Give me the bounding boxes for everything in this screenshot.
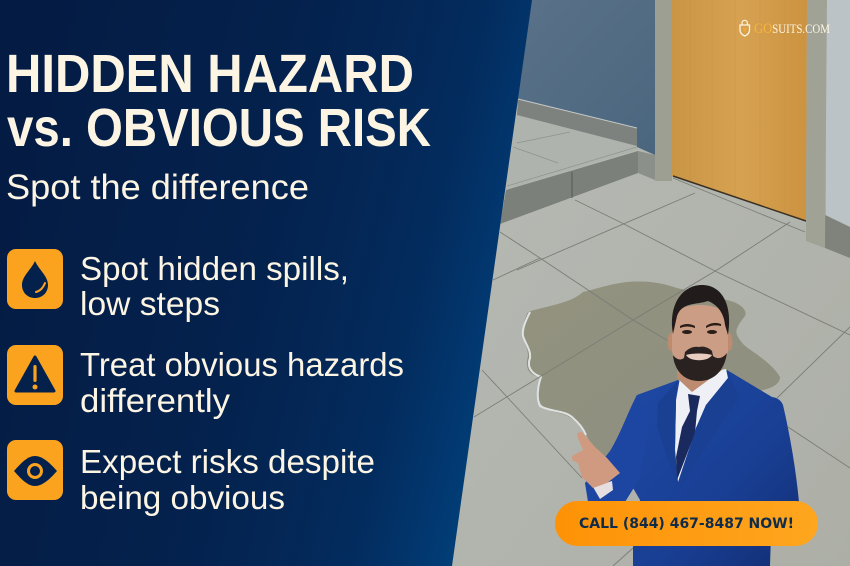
list item: expect risks: being obvious bbox=[80, 480, 285, 517]
wall bbox=[510, 0, 655, 155]
tie bbox=[676, 394, 700, 480]
subtitle: Spot the difference bbox=[6, 168, 309, 207]
list item: expect risks: Expect risks despite bbox=[80, 444, 375, 481]
floor tile joints bbox=[474, 178, 850, 566]
logo: GOSUITS.COM bbox=[754, 21, 830, 37]
door frame right bbox=[806, 0, 827, 248]
right wall bbox=[826, 0, 850, 227]
lapels bbox=[657, 380, 678, 488]
list item: obvious hazards bbox=[80, 347, 404, 420]
title: HIDDEN HAZARD bbox=[6, 45, 414, 104]
icon: water drop bbox=[7, 249, 63, 309]
hair bbox=[672, 285, 729, 335]
title bbox=[6, 45, 431, 158]
spill edge bbox=[523, 312, 586, 435]
shirt bbox=[675, 369, 728, 482]
step riser bbox=[500, 151, 638, 224]
baseboard upper bbox=[517, 99, 637, 146]
list item: hidden spills: Spot hidden spills, bbox=[80, 251, 349, 288]
face bbox=[672, 305, 728, 380]
icon: eye bbox=[7, 440, 63, 500]
suit torso bbox=[612, 370, 799, 566]
list item: hidden spills: low steps bbox=[80, 286, 220, 323]
list item: obvious hazards: Treat obvious hazards bbox=[80, 347, 404, 384]
call to action button: CALL (844) 467-8487 NOW! bbox=[579, 516, 794, 532]
title: vs. OBVIOUS RISK bbox=[7, 99, 431, 158]
hand bbox=[572, 432, 620, 488]
man in blue suit bbox=[572, 285, 799, 566]
spill bbox=[522, 281, 780, 470]
beard bbox=[673, 347, 727, 381]
door bbox=[672, 0, 807, 221]
list item: hidden spills bbox=[80, 251, 349, 323]
door frame left bbox=[655, 0, 672, 181]
cuff bbox=[593, 481, 613, 499]
photo: hallway floor and door bbox=[440, 0, 850, 566]
call to action button bbox=[555, 501, 818, 546]
smile bbox=[686, 354, 712, 360]
step top bbox=[503, 115, 637, 189]
baseboard lower bbox=[638, 151, 655, 180]
brows and eyes bbox=[680, 323, 721, 334]
suit arm bbox=[585, 395, 650, 502]
left navy panel bbox=[0, 0, 532, 566]
ears bbox=[668, 333, 674, 351]
list item: expect risks bbox=[80, 444, 375, 517]
neck bbox=[677, 352, 722, 392]
list item: obvious hazards: differently bbox=[80, 383, 230, 420]
icon: warning triangle bbox=[7, 345, 63, 405]
